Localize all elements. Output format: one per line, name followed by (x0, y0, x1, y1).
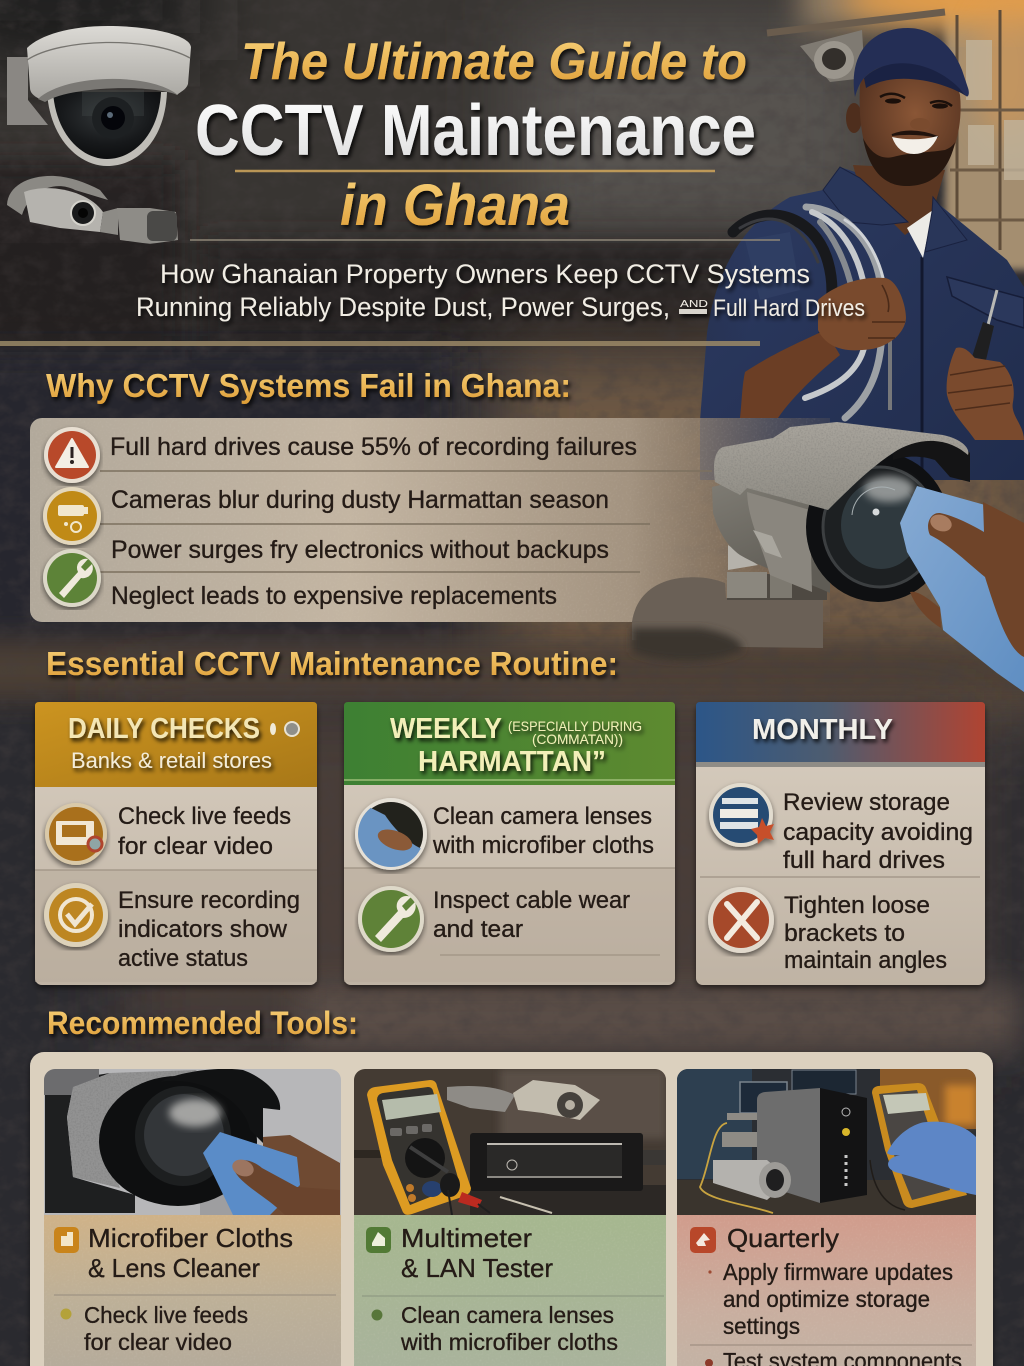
column: quarterly (677, 1215, 976, 1366)
list: daily tasks 2 (118, 887, 300, 972)
illustration: technician (700, 28, 1024, 480)
heading: why systems fail: Why CCTV Systems Fail in Ghana: (46, 367, 571, 404)
hand (263, 1135, 340, 1215)
list: monthly tasks 1 (783, 789, 973, 874)
list: weekly tasks 2: and tear (433, 916, 523, 943)
ear (846, 103, 862, 133)
camera body (712, 480, 830, 593)
header: monthly (696, 702, 985, 767)
black cable coil (733, 215, 832, 355)
subtitle: Full Hard Drives (713, 295, 865, 322)
header: weekly (344, 702, 675, 785)
panel: recommended tools (30, 1052, 993, 1366)
bracket (7, 57, 48, 125)
column: quarterly: Quarterly (727, 1223, 839, 1253)
decorative title rules (0, 171, 780, 346)
fist (818, 278, 906, 350)
column: microfiber cloths: & Lens Cleaner (88, 1253, 260, 1283)
hood (714, 422, 968, 510)
header: weekly: WEEKLY (390, 713, 502, 745)
list: weekly tasks 1: Clean camera lenses (433, 803, 652, 830)
shelf (722, 1113, 757, 1147)
dusty body (67, 1070, 197, 1188)
column: microfiber cloths: Check live feeds (84, 1302, 248, 1328)
glove (887, 1122, 976, 1195)
header: daily checks: DAILY CHECKS (68, 713, 260, 745)
list: monthly tasks 1: capacity avoiding (783, 819, 973, 846)
illustration: bullet cameras (7, 176, 178, 244)
heading: recommended tools: Recommended Tools: (47, 1005, 358, 1041)
icon: wrench (43, 549, 101, 607)
sleeve fold (745, 232, 800, 300)
subtitle: How Ghanaian Property Owners Keep CCTV Systems (160, 259, 810, 289)
header: weekly: (COMMATAN)) (532, 731, 623, 747)
forearm (740, 330, 840, 418)
title (195, 33, 756, 238)
box (757, 1088, 820, 1203)
list: monthly tasks 2: maintain angles (784, 947, 947, 974)
header: weekly: HARMATTAN” (418, 746, 606, 778)
icon: wrench (358, 886, 424, 952)
column: multimeter: & LAN Tester (401, 1253, 553, 1283)
column: multimeter: with microfiber cloths (400, 1329, 618, 1355)
list: daily tasks 2: indicators show (118, 916, 287, 943)
finger (233, 1160, 340, 1215)
reason 3: Power surges fry electronics without backups (111, 536, 609, 564)
title line 1: The Ultimate Guide to (241, 33, 747, 91)
header: weekly: (ESPECIALLY DURING (508, 718, 642, 734)
list: monthly tasks 1: full hard drives (783, 847, 945, 874)
icon: storage (709, 783, 774, 847)
reason 4: Neglect leads to expensive replacements (111, 582, 557, 610)
beard (863, 138, 955, 186)
hand (928, 502, 1024, 657)
hood interior (893, 437, 970, 482)
cap (854, 28, 969, 97)
list: daily tasks 1 (118, 803, 291, 860)
hood (160, 1069, 280, 1143)
smile (892, 136, 938, 154)
face (860, 77, 961, 158)
neck (853, 165, 945, 235)
undershirt (907, 210, 933, 258)
band behind subtitle (144, 243, 684, 341)
title line 3: in Ghana (340, 173, 570, 238)
list: daily tasks 1: Check live feeds (118, 803, 291, 830)
photo: cleaning a lens (44, 1069, 341, 1215)
subtitle: AND (680, 299, 708, 310)
illustration: wall camera behind technician (800, 30, 865, 82)
column: microfiber cloths: Microfiber Cloths (88, 1223, 293, 1253)
list: weekly tasks 1 (432, 803, 654, 859)
icon: live feed monitor (45, 803, 107, 865)
icon: tools (708, 887, 774, 953)
column: quarterly: and optimize storage (723, 1286, 930, 1312)
screwdriver (972, 290, 997, 360)
icon: microfiber tag (54, 1227, 79, 1253)
photo: hard drive and testing (677, 1069, 976, 1215)
wall arm (632, 577, 823, 648)
nose (910, 118, 923, 124)
lens (99, 1076, 257, 1206)
eyes and brows (880, 94, 952, 106)
list: daily tasks 2: Ensure recording (118, 887, 300, 914)
icon: dust camera (43, 487, 101, 545)
icon: warning (44, 427, 100, 483)
panel: why systems fail (30, 418, 830, 622)
silver camera (713, 1160, 790, 1200)
background: warehouse shelves behind technician (767, 0, 1024, 270)
lens housing (806, 452, 950, 602)
dome glass (47, 92, 167, 166)
heading: maintenance routine: Essential CCTV Maintenance Routine: (46, 645, 618, 682)
column: multimeter (354, 1215, 666, 1366)
subtitle: Running Reliably Despite Dust, Power Surges, (136, 292, 670, 322)
list: daily tasks 1: for clear video (118, 833, 273, 860)
torso and uniform (700, 167, 1024, 480)
meter (872, 1083, 967, 1208)
icon: quarterly tag (690, 1227, 716, 1253)
illustration: dome camera (7, 26, 191, 166)
reason 2: Cameras blur during dusty Harmattan season (111, 486, 609, 514)
icon: multimeter tag (366, 1227, 391, 1253)
DVR (470, 1133, 643, 1191)
collars (823, 167, 908, 225)
column: microfiber cloths (44, 1215, 341, 1366)
list: monthly tasks 2: brackets to (784, 920, 905, 947)
meter (367, 1080, 471, 1215)
icon: check mark (44, 883, 108, 947)
title line 2: CCTV Maintenance (195, 91, 756, 171)
list: monthly tasks 1: Review storage (783, 789, 950, 816)
column: microfiber cloths: for clear video (84, 1329, 232, 1355)
subtitle (136, 259, 865, 322)
housing (27, 26, 191, 99)
cloth (900, 486, 1024, 692)
illustration: dusty bullet camera being wiped (632, 422, 1024, 692)
list: weekly tasks 1: with microfiber cloths (432, 832, 654, 859)
photo: multimeter and DVR (354, 1069, 666, 1215)
header: monthly: MONTHLY (752, 714, 893, 746)
header: daily checks: Banks & retail stores (71, 748, 272, 773)
wire (700, 1123, 773, 1213)
column: multimeter: Clean camera lenses (401, 1302, 614, 1328)
panel: monthly (696, 702, 985, 985)
camera (447, 1086, 515, 1112)
right hand (947, 347, 1024, 440)
list: weekly tasks 2 (433, 887, 630, 943)
cloth (203, 1132, 300, 1215)
panel: weekly (344, 702, 675, 985)
pocket flap (947, 277, 1024, 328)
column: quarterly: settings (723, 1313, 800, 1339)
panel: daily checks (35, 702, 317, 985)
icon: cloth and finger (355, 798, 427, 870)
header: daily checks (35, 702, 317, 787)
reason 1: Full hard drives cause 55% of recording failures (110, 433, 637, 461)
grey cable coil (805, 207, 886, 418)
list: weekly tasks 2: Inspect cable wear (433, 887, 630, 914)
zip (920, 257, 924, 470)
mount (45, 1073, 135, 1213)
column: multimeter: Multimeter (401, 1223, 532, 1253)
list: monthly tasks 2: Tighten loose (784, 892, 930, 919)
column: quarterly: Apply firmware updates (723, 1259, 953, 1285)
list: daily tasks 2: active status (118, 945, 248, 972)
list: monthly tasks 2 (784, 892, 947, 974)
